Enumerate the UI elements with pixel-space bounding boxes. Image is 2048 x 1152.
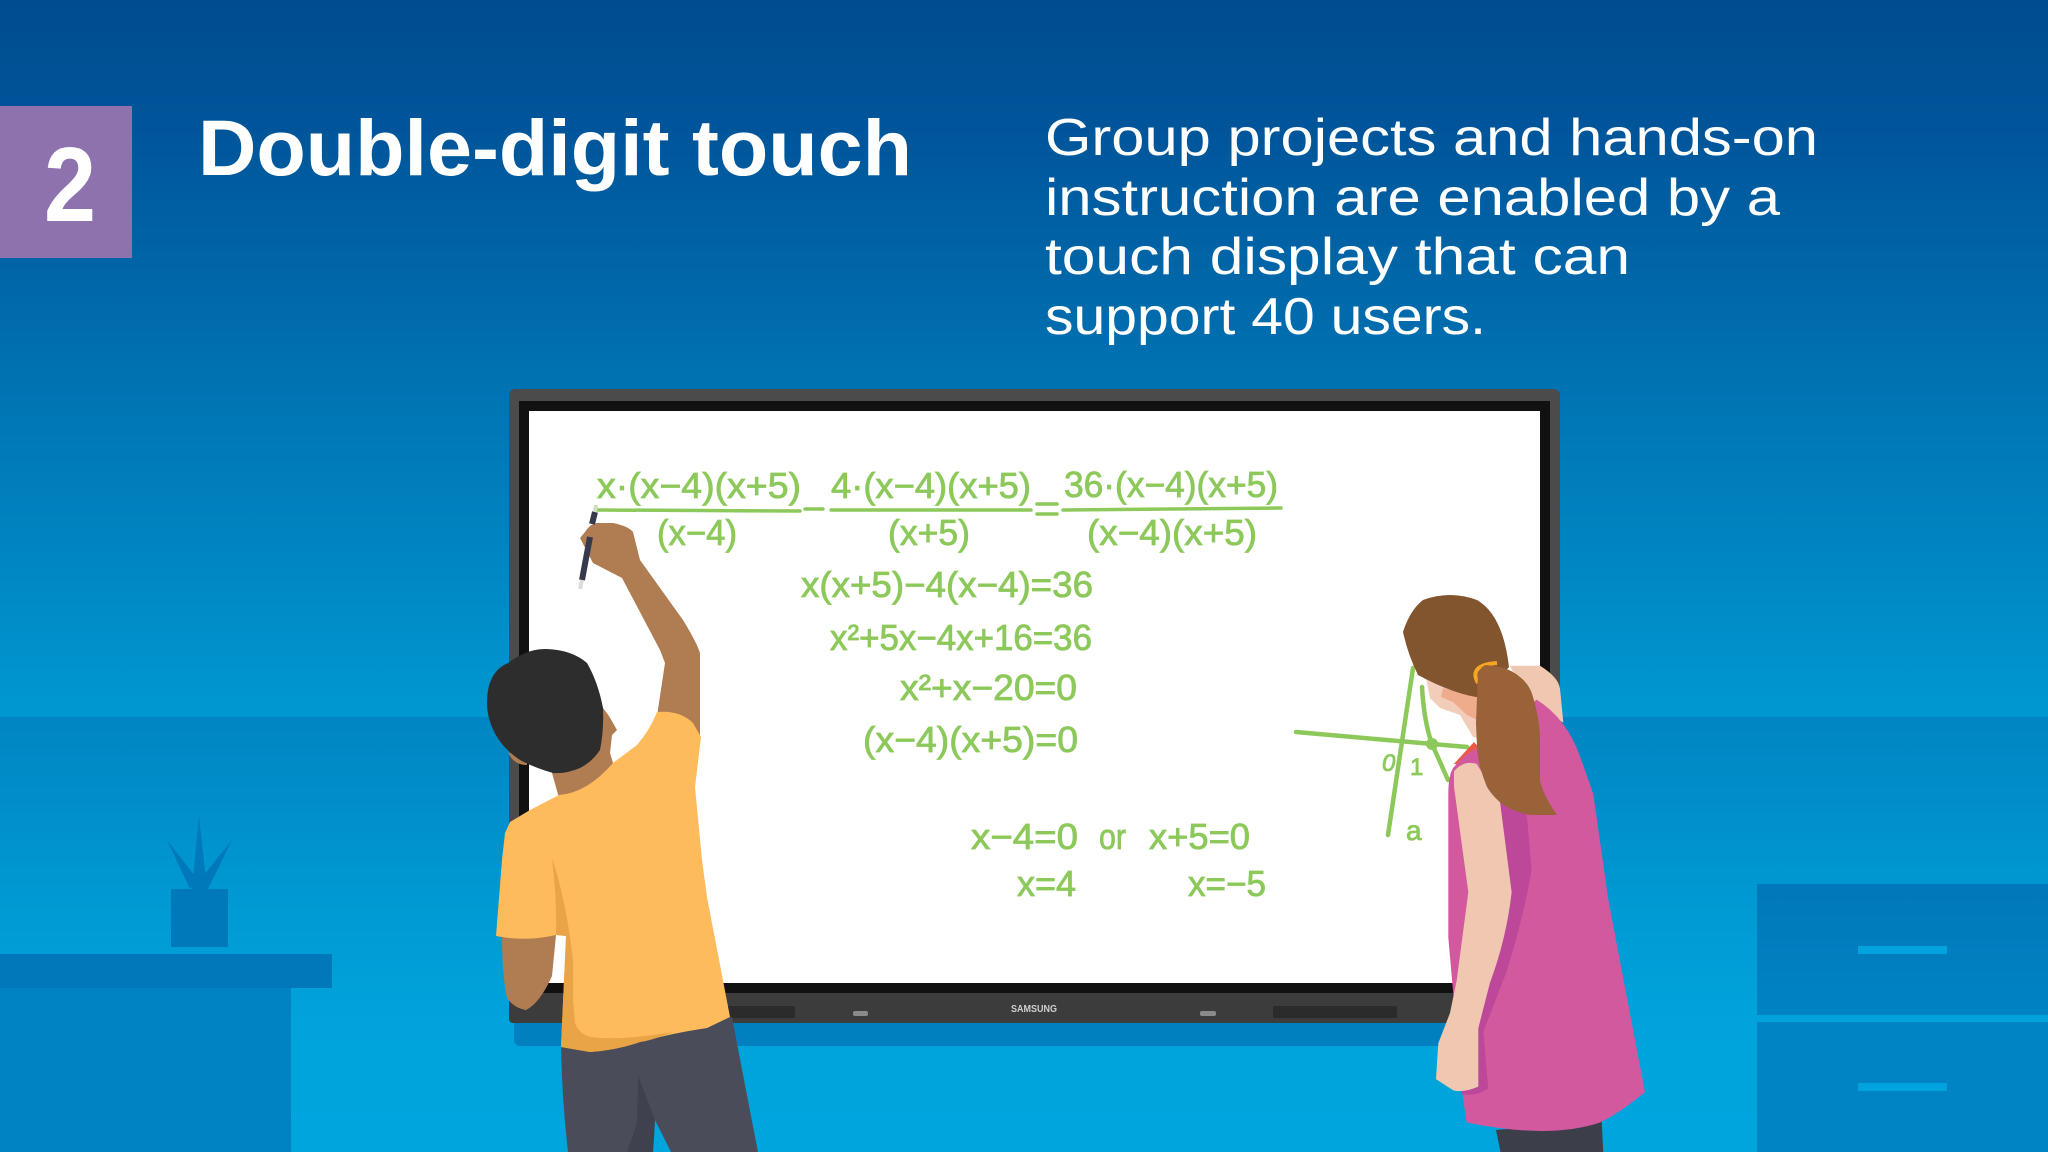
handwritten algebra: x²+5x−4x+16=36 xyxy=(830,617,1092,658)
boy trouser inner leg xyxy=(627,1075,655,1152)
girl neck shadow xyxy=(1441,688,1484,720)
monitor shadow xyxy=(514,1000,1554,1046)
handwritten algebra: x·(x−4)(x+5) xyxy=(597,465,801,506)
red undershirt strap xyxy=(1454,742,1480,766)
hair tie xyxy=(1475,663,1497,683)
handwritten algebra: 4·(x−4)(x+5) xyxy=(831,465,1031,506)
description text: instruction are enabled by a xyxy=(1045,169,1780,227)
handwritten algebra: (x−4) xyxy=(657,512,737,553)
boy t-shirt xyxy=(496,712,730,1052)
boy far ear xyxy=(508,752,527,765)
handwritten algebra: (x+5) xyxy=(888,512,970,553)
boy shirt shading xyxy=(552,858,673,1052)
girl dress xyxy=(1448,700,1645,1131)
boy raised arm and hand xyxy=(580,523,700,735)
interactive display xyxy=(509,389,1560,1023)
handwritten algebra: x−4=0 xyxy=(971,816,1078,857)
number badge xyxy=(0,106,132,258)
parabola graph: 1 xyxy=(1410,754,1423,781)
description text: support 40 users. xyxy=(1045,288,1486,346)
handwritten algebra: x=4 xyxy=(1017,863,1076,904)
girl trousers xyxy=(1496,1121,1603,1152)
handwritten algebra: or xyxy=(1099,816,1126,857)
parabola graph: 0 xyxy=(1382,750,1396,777)
boy hair xyxy=(487,649,603,773)
girl dress shading xyxy=(1462,802,1532,1095)
desk and plant silhouette xyxy=(0,816,332,1152)
girl arm xyxy=(1436,763,1512,1091)
button right xyxy=(1200,1011,1216,1016)
background lower wall and floor xyxy=(0,717,2048,1152)
button left xyxy=(853,1011,868,1016)
handwritten algebra: x=−5 xyxy=(1188,863,1266,904)
background upper wall xyxy=(0,0,2048,718)
handwritten algebra: (x−4)(x+5) xyxy=(1087,512,1257,553)
speaker slot left xyxy=(690,1006,795,1018)
boy lower forearm xyxy=(502,935,556,1010)
description text: Group projects and hands-on xyxy=(1045,109,1818,167)
handwritten algebra: (x−4)(x+5)=0 xyxy=(863,719,1078,760)
parabola graph: a xyxy=(1406,815,1422,846)
handwritten algebra: x+5=0 xyxy=(1149,816,1250,857)
girl far arm xyxy=(1510,666,1563,722)
handwritten algebra: x²+x−20=0 xyxy=(900,667,1077,708)
boy writing on the display xyxy=(487,505,758,1152)
handwritten algebra: 36·(x−4)(x+5) xyxy=(1064,464,1278,505)
girl face and neck xyxy=(1418,673,1490,740)
girl hair xyxy=(1403,595,1509,698)
filing cabinet silhouette xyxy=(1757,884,2048,1152)
girl touching the display xyxy=(1403,595,1645,1152)
description text xyxy=(1045,109,1818,346)
handwritten algebra xyxy=(597,464,1281,904)
title: Double-digit touch xyxy=(198,103,912,192)
parabola graph xyxy=(1296,668,1467,846)
ponytail xyxy=(1476,665,1557,815)
number badge: 2 xyxy=(44,126,96,244)
description text: touch display that can xyxy=(1045,228,1630,286)
handwritten algebra: x(x+5)−4(x−4)=36 xyxy=(801,564,1093,605)
boy trousers xyxy=(561,1017,758,1152)
speaker slot right xyxy=(1273,1006,1397,1018)
stylus xyxy=(580,505,596,589)
girl lower body group xyxy=(1436,666,1645,1152)
boy neck and ear xyxy=(552,708,617,800)
brand label: SAMSUNG xyxy=(1011,1004,1057,1015)
